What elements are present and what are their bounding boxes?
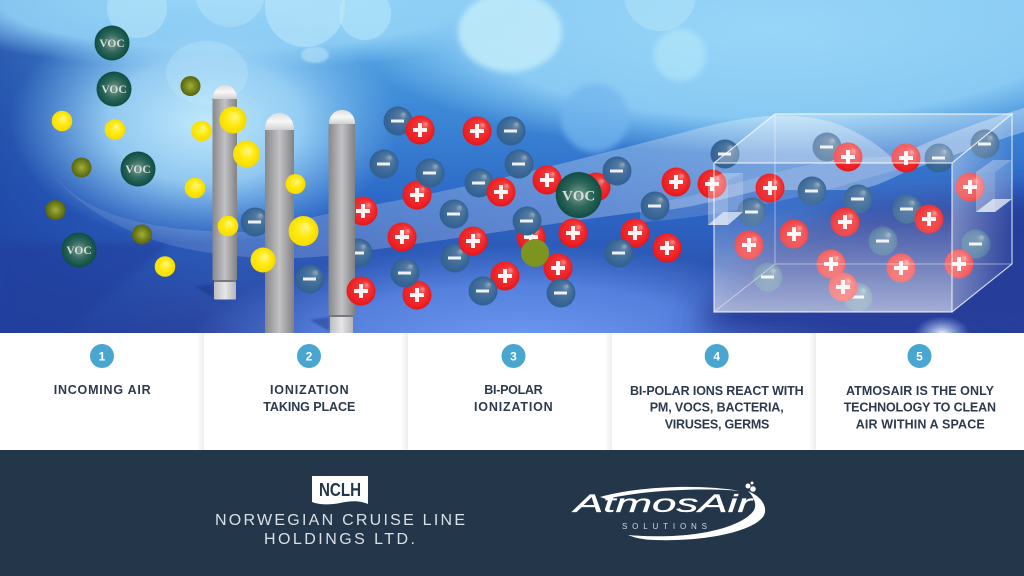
- yellow particles over needles: [218, 106, 318, 272]
- step 3: BI-POLAR: [484, 383, 543, 397]
- VOC molecule: VOC: [99, 38, 125, 50]
- step 3: 3: [510, 350, 517, 364]
- left air vent: [708, 173, 743, 225]
- step 5: TECHNOLOGY TO CLEAN: [844, 401, 996, 415]
- step 2: [263, 344, 355, 414]
- step 3: [474, 344, 553, 414]
- step 1: INCOMING AIR: [54, 383, 151, 397]
- olive particle reacting: [521, 239, 549, 267]
- step 4: BI-POLAR IONS REACT WITH: [630, 384, 804, 398]
- VOC molecule: VOC: [125, 164, 151, 176]
- step 1: [54, 344, 151, 397]
- step 1: 1: [99, 350, 106, 364]
- second ionization needle: [265, 113, 294, 333]
- Norwegian Cruise Line name: HOLDINGS LTD.: [264, 531, 415, 548]
- Norwegian Cruise Line name: NORWEGIAN CRUISE LINE: [215, 512, 465, 529]
- VOC molecule: [96, 72, 132, 106]
- footer band: [0, 450, 1024, 576]
- step 2: IONIZATION: [270, 383, 349, 397]
- step 3: IONIZATION: [474, 400, 553, 414]
- step 2: TAKING PLACE: [263, 400, 355, 414]
- NCLH logo badge: NCLH: [319, 480, 361, 500]
- negative ions near needles: [240, 208, 324, 294]
- AtmosAir logo: [570, 482, 765, 540]
- central VOC molecule: [556, 172, 602, 218]
- AtmosAir logo: AtmosAir: [570, 490, 755, 518]
- VOC molecule: [120, 152, 156, 186]
- first ionization needle: [195, 85, 237, 300]
- step 5: ATMOSAIR IS THE ONLY: [846, 384, 995, 398]
- transparent room box: [708, 114, 1012, 312]
- step 4: PM, VOCS, BACTERIA,: [650, 401, 784, 415]
- ions reacting to the right: [602, 156, 690, 268]
- scene background: [0, 0, 1024, 333]
- right air vent: [976, 160, 1012, 212]
- ions inside the room: [698, 130, 1000, 312]
- AtmosAir logo: SOLUTIONS: [622, 522, 707, 531]
- olive particles: [46, 76, 200, 244]
- ions behind third needle: [344, 196, 378, 268]
- bi-polar ions cluster: [346, 106, 610, 310]
- step 4: [630, 344, 804, 432]
- VOC molecule: VOC: [101, 84, 127, 96]
- NCLH logo badge: [312, 476, 368, 504]
- central VOC molecule: VOC: [562, 188, 595, 204]
- VOC molecule: [94, 26, 130, 60]
- step 5: AIR WITHIN A SPACE: [856, 418, 985, 432]
- step 5: [844, 344, 996, 432]
- VOC molecule: [62, 232, 96, 268]
- white step panel: [0, 333, 1024, 450]
- step 4: 4: [713, 350, 720, 364]
- step 5: 5: [916, 350, 923, 364]
- VOC molecule: VOC: [66, 245, 92, 257]
- Norwegian Cruise Line name: [215, 512, 465, 548]
- third ionization needle: [310, 110, 355, 333]
- yellow particles on the left: [52, 111, 212, 277]
- step 4: VIRUSES, GERMS: [665, 418, 769, 432]
- step 2: 2: [306, 350, 313, 364]
- incoming air particles: [46, 26, 212, 277]
